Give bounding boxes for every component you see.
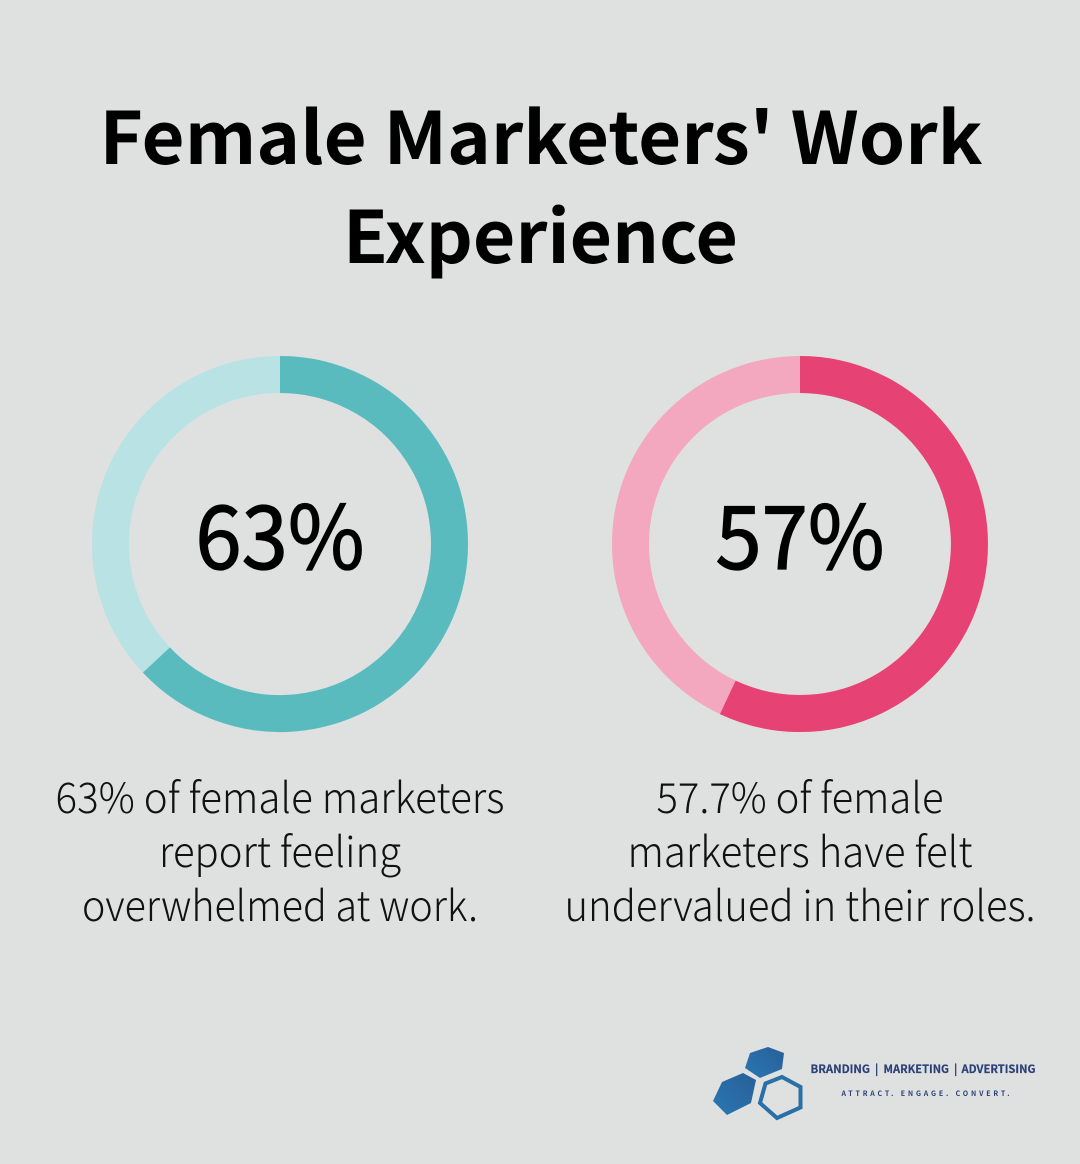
donut chart: 57%: 57% [716, 468, 884, 595]
brand tagline: MARKETING [884, 1061, 949, 1077]
text block: overwhelmed stat: 63% of female marketers [56, 765, 504, 826]
brand tagline: | [875, 1061, 878, 1077]
brand slogan: ATTRACT. ENGAGE. CONVERT. [840, 1089, 1010, 1099]
logo [713, 1047, 1036, 1118]
text block: overwhelmed stat: report feeling [159, 819, 401, 880]
brand tagline: ADVERTISING [960, 1061, 1036, 1077]
brand tagline: BRANDING [810, 1061, 870, 1077]
title: Female Marketers' Work [100, 80, 983, 185]
title [100, 80, 983, 284]
brand tagline [810, 1061, 1036, 1077]
brand tagline: | [954, 1061, 957, 1077]
icon: hexagons [713, 1047, 800, 1118]
text block: undervalued stat: 57.7% of female [656, 765, 944, 826]
text block: overwhelmed stat: overwhelmed at work. [82, 873, 478, 934]
donut chart: 63% [110, 374, 450, 714]
text block: overwhelmed stat [56, 765, 504, 934]
text block: undervalued stat: undervalued in their roles. [564, 873, 1036, 934]
title: Experience [343, 179, 738, 284]
text block: undervalued stat: marketers have felt [628, 819, 973, 880]
donut chart: 57% [630, 374, 970, 714]
text block: undervalued stat [564, 765, 1036, 934]
donut chart: 63%: 63% [196, 468, 364, 595]
